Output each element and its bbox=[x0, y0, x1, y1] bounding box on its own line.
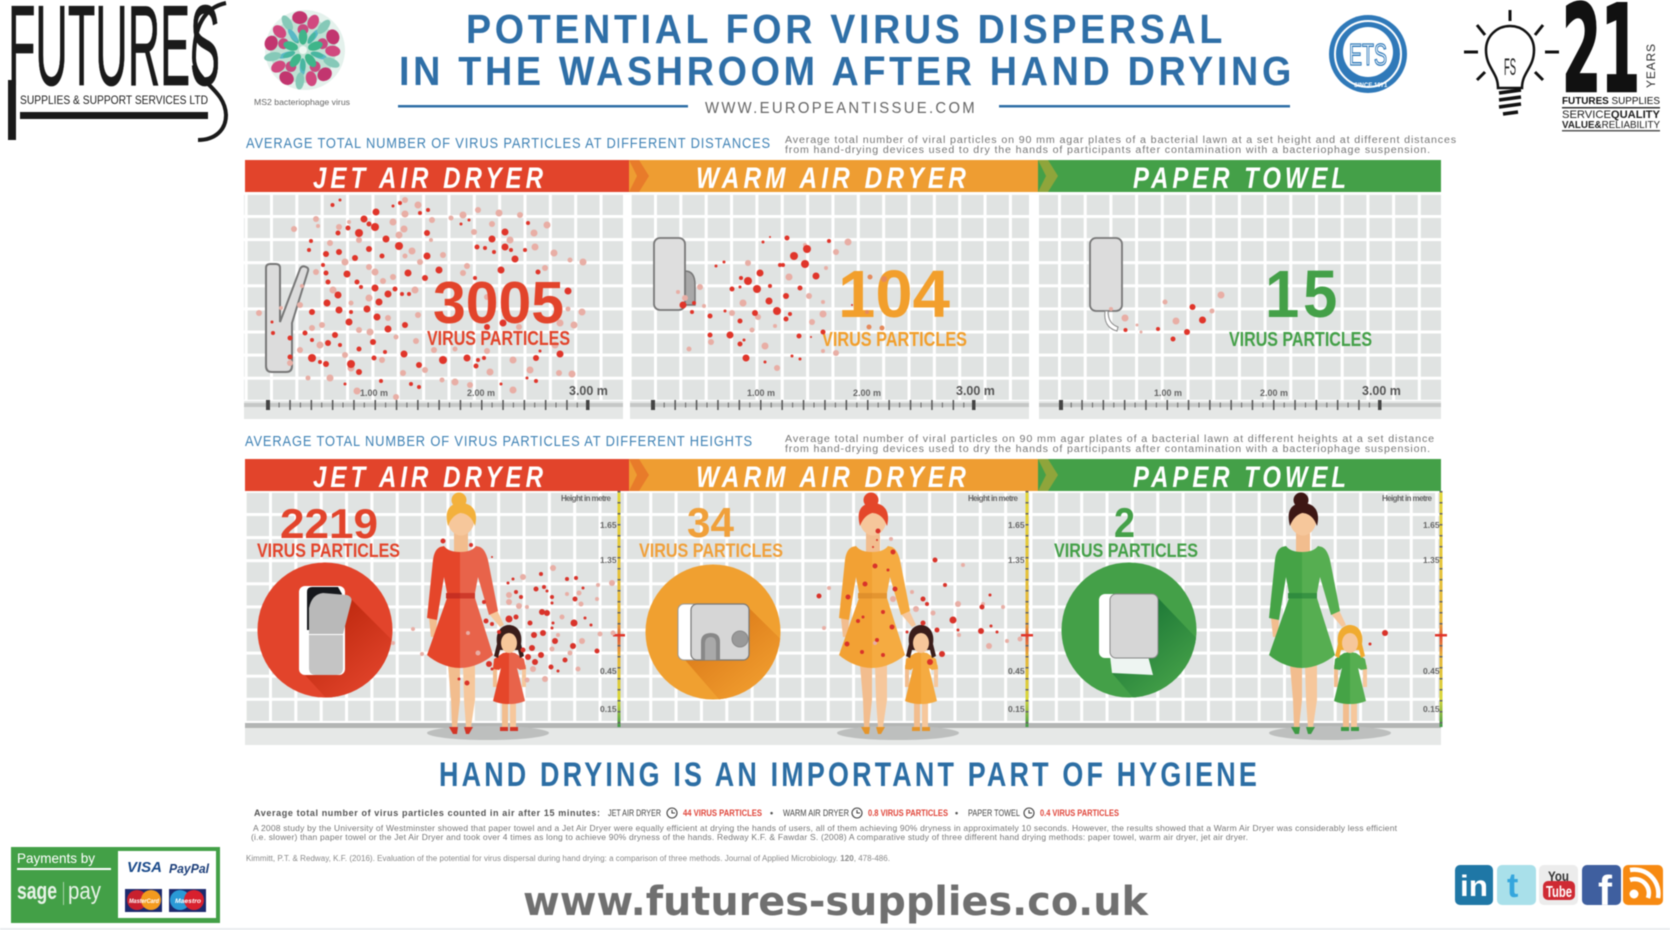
ruler: warm distance: 1.00 m bbox=[747, 388, 775, 398]
icon: linkedin: in bbox=[1460, 870, 1488, 903]
panel: jet air dryer distance bbox=[244, 193, 623, 419]
study paragraph: (i.e. slower) than paper towel or the Jet Air Dryer and took over 4 times as long to achieve 90% dryness of the hands. Redway K.F. & Fawdar S. (2008) A comparative study of three different hand drying methods: paper towel, warm air dryer, jet air dryer. bbox=[251, 832, 1248, 842]
height scale: jet: 1.65 bbox=[600, 520, 617, 530]
logo: 21 years: FS bbox=[1504, 54, 1516, 81]
number: 104 virus particles: VIRUS PARTICLES bbox=[822, 328, 967, 351]
ruler: warm distance: 2.00 m bbox=[853, 388, 881, 398]
header bar: heights: PAPER TOWEL bbox=[1133, 461, 1350, 494]
ruler: towel distance: 3.00 m bbox=[1362, 384, 1401, 398]
number: 15 virus particles: 15 bbox=[1265, 257, 1341, 332]
figure: mother and child, towel bbox=[1269, 492, 1391, 740]
ruler: towel distance bbox=[1039, 384, 1441, 410]
ruler: warm distance: 3.00 m bbox=[956, 384, 995, 398]
icon: twitter: t bbox=[1507, 867, 1518, 905]
number: 2 virus particles bbox=[1054, 499, 1198, 562]
description: heights: from hand-drying devices used to dry the hands of participants after contamination with a bacteriophage suspension. bbox=[785, 444, 1431, 455]
payments badge: MasterCard bbox=[129, 898, 160, 905]
height scale: towel: 1.65 bbox=[1423, 520, 1440, 530]
air count summary: 0.8 VIRUS PARTICLES bbox=[868, 808, 948, 818]
logo: 21 years: VALUE&RELIABILITY bbox=[1562, 120, 1660, 131]
icon: MS2 bacteriophage virus: MS2 bacteriophage virus bbox=[254, 97, 350, 107]
icon: facebook: f bbox=[1598, 867, 1613, 914]
air count summary: 44 VIRUS PARTICLES bbox=[683, 808, 762, 818]
icon: linkedin bbox=[1455, 865, 1493, 905]
citation: Kimmitt, P.T. & Redway, K.F. (2016). Evaluation of the potential for virus dispersal during hand drying: a comparison of three methods. Journal of Applied Microbiology. 120, 478-486. bbox=[246, 854, 890, 863]
title: IN THE WASHROOM AFTER HAND DRYING bbox=[399, 48, 1295, 94]
height scale: towel: 0.45 bbox=[1423, 666, 1440, 676]
heading: hand drying hygiene: HAND DRYING IS AN IMPORTANT PART OF HYGIENE bbox=[439, 756, 1260, 794]
ruler: jet distance: 1.00 m bbox=[360, 388, 388, 398]
height scale: jet: 0.15 bbox=[600, 704, 617, 714]
section heading: distances: AVERAGE TOTAL NUMBER OF VIRUS PARTICLES AT DIFFERENT DISTANCES bbox=[246, 135, 771, 152]
header bar: heights: WARM AIR DRYER bbox=[696, 461, 970, 494]
header bar: distances bbox=[245, 160, 1441, 195]
logo: ETS: ETS bbox=[1349, 37, 1387, 72]
particles: warm distance dark bbox=[680, 236, 853, 364]
number: 104 virus particles: 104 bbox=[838, 257, 950, 332]
number: 3005 virus particles: VIRUS PARTICLES bbox=[427, 327, 570, 350]
number: 15 virus particles: VIRUS PARTICLES bbox=[1229, 328, 1372, 351]
number: 3005 virus particles: 3005 bbox=[433, 270, 564, 336]
header bar: distances: JET AIR DRYER bbox=[313, 162, 547, 195]
payments badge: Maestro bbox=[175, 898, 201, 905]
logo: ETS: SINCE 1971 bbox=[1354, 83, 1388, 89]
panel: warm air dryer distance bbox=[630, 193, 1029, 419]
icon: twitter bbox=[1497, 865, 1536, 905]
number: 2 virus particles: VIRUS PARTICLES bbox=[1054, 540, 1198, 562]
height scale: warm: 0.45 bbox=[1008, 666, 1025, 676]
height scale: jet: 0.45 bbox=[600, 666, 617, 676]
header bar: distances: WARM AIR DRYER bbox=[696, 162, 970, 195]
logo: 21 years: SERVICEQUALITY bbox=[1562, 109, 1661, 121]
height scale: towel: 0.15 bbox=[1423, 704, 1440, 714]
panel: paper towel distance bbox=[1039, 193, 1441, 419]
air count summary: • bbox=[770, 808, 773, 818]
number: 2219 virus particles: 2219 bbox=[280, 500, 378, 547]
particles: jet distance light bbox=[256, 197, 586, 400]
particles: warm distance light bbox=[676, 238, 852, 371]
logo: ETS bbox=[1329, 15, 1407, 93]
number: 15 virus particles bbox=[1229, 257, 1372, 351]
number: 34 virus particles: 34 bbox=[687, 499, 735, 546]
title bbox=[399, 6, 1295, 94]
height scale: warm: Height in metre bbox=[968, 494, 1019, 503]
particles: towel distance bbox=[1109, 292, 1224, 342]
section heading: heights: AVERAGE TOTAL NUMBER OF VIRUS PARTICLES AT DIFFERENT HEIGHTS bbox=[245, 433, 753, 450]
number: 34 virus particles: VIRUS PARTICLES bbox=[639, 540, 783, 562]
figure: mother and child, warm bbox=[837, 492, 959, 740]
payments badge bbox=[11, 847, 220, 923]
number: 2219 virus particles: VIRUS PARTICLES bbox=[257, 540, 400, 562]
number: 104 virus particles bbox=[822, 257, 967, 351]
icon: towel dispenser side view bbox=[1090, 238, 1122, 331]
height scale: warm: 1.65 bbox=[1008, 520, 1025, 530]
air count summary bbox=[254, 808, 1119, 818]
height scale: towel: 1.35 bbox=[1423, 555, 1440, 565]
height scale: jet: 1.35 bbox=[600, 555, 617, 565]
website url: www.futures-supplies.co.uk bbox=[523, 879, 1149, 925]
logo: 21 years bbox=[1464, 0, 1661, 132]
description: distances bbox=[785, 135, 1457, 156]
particles: jet heights bbox=[391, 538, 616, 686]
description: heights bbox=[785, 434, 1435, 455]
study paragraph: A 2008 study by the University of Westminster showed that paper towel and a Jet Air Dryer were equally efficient at drying the hands of users, all of them achieving 90% dryness in approximately 10 seconds. However, the results showed that a Warm Air Dryer was considerably less efficient bbox=[253, 823, 1398, 833]
payments badge: PayPal bbox=[169, 861, 209, 876]
icon: warm dryer side view bbox=[654, 238, 695, 310]
logo: 21 years: FUTURES SUPPLIES bbox=[1562, 95, 1660, 107]
payments badge: VISA bbox=[127, 859, 162, 876]
icon: facebook bbox=[1582, 865, 1621, 914]
study paragraph bbox=[251, 823, 1398, 842]
number: 34 virus particles bbox=[639, 499, 783, 562]
ruler: jet distance bbox=[244, 384, 623, 410]
icon: jet dryer circle bbox=[256, 562, 394, 698]
ruler: jet distance: 3.00 m bbox=[569, 384, 608, 398]
header bar: heights: JET AIR DRYER bbox=[313, 461, 547, 494]
icon: youtube: You bbox=[1548, 868, 1569, 884]
website subtitle: WWW.EUROPEANTISSUE.COM bbox=[705, 100, 977, 117]
air count summary: WARM AIR DRYER bbox=[783, 808, 849, 818]
header bar: distances: PAPER TOWEL bbox=[1133, 162, 1350, 195]
description: heights: Average total number of viral particles on 90 mm agar plates of a bacterial lawn at different heights at a set distance bbox=[785, 434, 1435, 445]
ruler: jet distance: 2.00 m bbox=[467, 388, 495, 398]
height scale: jet bbox=[561, 491, 625, 727]
icon: youtube: Tube bbox=[1546, 884, 1572, 901]
particles: warm distance over number bbox=[865, 274, 887, 330]
air count summary: JET AIR DRYER bbox=[608, 808, 661, 818]
icon: rss bbox=[1623, 865, 1663, 905]
particles: warm heights bbox=[816, 528, 1022, 665]
height scale: towel bbox=[1382, 491, 1447, 727]
figure: mother and child, jet bbox=[427, 492, 549, 740]
logo: Futures Supplies & Support Services: SUPPLIES & SUPPORT SERVICES LTD bbox=[20, 93, 208, 107]
height scale: warm: 0.15 bbox=[1008, 704, 1025, 714]
height scale: warm: 1.35 bbox=[1008, 555, 1025, 565]
number: 2 virus particles: 2 bbox=[1114, 499, 1135, 546]
panel: height comparison background bbox=[245, 491, 1441, 745]
logo: 21 years: YEARS bbox=[1644, 44, 1658, 88]
description: distances: from hand-drying devices used to dry the hands of participants after contamination with a bacteriophage suspension. bbox=[785, 145, 1431, 156]
height scale: warm bbox=[968, 491, 1033, 727]
social icons bbox=[1455, 865, 1663, 914]
icon: towel dispenser circle bbox=[1060, 562, 1198, 698]
height scale: jet: Height in metre bbox=[561, 494, 612, 503]
header bar: heights bbox=[245, 459, 1441, 494]
ruler: warm distance bbox=[630, 384, 1029, 410]
air count summary: Average total number of virus particles counted in air after 15 minutes: bbox=[254, 808, 600, 818]
title: POTENTIAL FOR VIRUS DISPERSAL bbox=[466, 6, 1226, 52]
payments badge: pay bbox=[68, 878, 101, 905]
air count summary: • bbox=[955, 808, 958, 818]
particles: towel heights bbox=[1368, 630, 1388, 646]
air count summary: 0.4 VIRUS PARTICLES bbox=[1040, 808, 1119, 818]
logo: Futures Supplies & Support Services bbox=[8, 0, 226, 140]
icon: MS2 bacteriophage virus bbox=[254, 10, 350, 107]
particles: jet distance dark bbox=[270, 198, 572, 389]
air count summary: PAPER TOWEL bbox=[968, 808, 1020, 818]
number: 2219 virus particles bbox=[257, 500, 400, 562]
description: distances: Average total number of viral particles on 90 mm agar plates of a bacterial lawn at a set height and at different distances bbox=[785, 135, 1457, 146]
icon: youtube bbox=[1539, 865, 1578, 905]
payments badge: Payments by bbox=[17, 850, 95, 866]
icon: jet dryer side view bbox=[266, 264, 308, 372]
height scale: towel: Height in metre bbox=[1382, 494, 1433, 503]
ruler: towel distance: 2.00 m bbox=[1260, 388, 1288, 398]
icon: warm dryer circle bbox=[644, 564, 782, 700]
ruler: towel distance: 1.00 m bbox=[1154, 388, 1182, 398]
payments badge: sage bbox=[17, 878, 57, 905]
